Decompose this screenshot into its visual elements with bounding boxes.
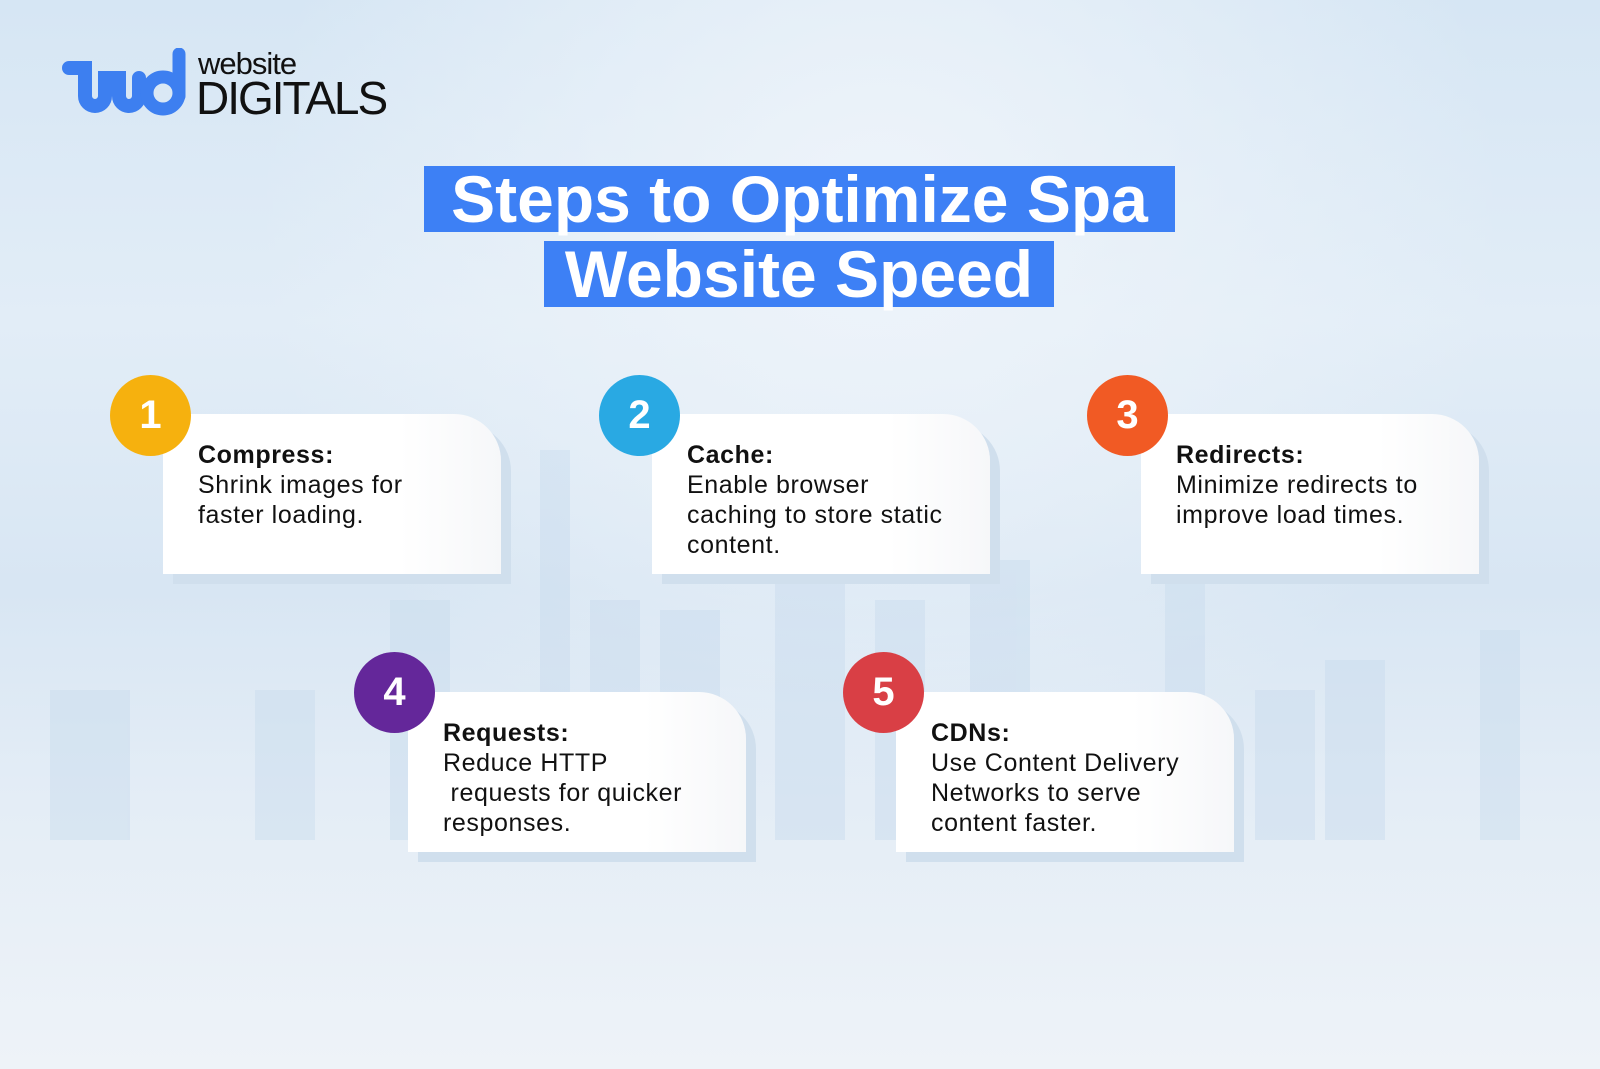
card 3: redirects: Minimize redirects to xyxy=(1176,471,1418,499)
card 3: redirects: improve load times. xyxy=(1176,501,1404,529)
title xyxy=(424,162,1175,311)
card 5: CDNs xyxy=(896,692,1234,852)
title: Website Speed xyxy=(565,237,1033,311)
card 5: CDNs: Use Content Delivery xyxy=(931,749,1179,777)
number 4: 4 xyxy=(383,670,406,714)
card 5: CDNs: CDNs: xyxy=(931,719,1010,747)
card 3: redirects: Redirects: xyxy=(1176,441,1304,469)
card 2: cache: content. xyxy=(687,531,781,559)
logo: website xyxy=(198,46,296,81)
card 2: cache: Cache: xyxy=(687,441,774,469)
card 2: cache: Enable browser xyxy=(687,471,869,499)
background skyline xyxy=(50,450,1520,840)
number 3 xyxy=(1087,375,1168,456)
card 4: requests: Requests: xyxy=(443,719,569,747)
number 3: 3 xyxy=(1116,393,1139,437)
card 4: requests: Reduce HTTP xyxy=(443,749,608,777)
title: Steps to Optimize Spa xyxy=(451,162,1148,236)
card 2: cache: caching to store static xyxy=(687,501,943,529)
card 4: requests xyxy=(408,692,746,852)
card 3: redirects xyxy=(1141,414,1479,574)
number 1 xyxy=(110,375,191,456)
card 1: compress: faster loading. xyxy=(198,501,364,529)
number 5 xyxy=(843,652,924,733)
card 1: compress: Compress: xyxy=(198,441,334,469)
card 1: compress: Shrink images for xyxy=(198,471,403,499)
logo: DIGITALS xyxy=(196,72,386,124)
card 5: CDNs: Networks to serve xyxy=(931,779,1141,807)
card 5: CDNs: content faster. xyxy=(931,809,1097,837)
number 2: 2 xyxy=(628,393,651,437)
number 2 xyxy=(599,375,680,456)
number 1: 1 xyxy=(139,393,162,437)
card 1: compress xyxy=(163,414,501,574)
number 5: 5 xyxy=(872,670,895,714)
card 4: requests: responses. xyxy=(443,809,571,837)
card 2: cache xyxy=(652,414,990,574)
logo xyxy=(62,46,386,124)
card 4: requests: requests for quicker xyxy=(451,779,682,807)
number 4 xyxy=(354,652,435,733)
